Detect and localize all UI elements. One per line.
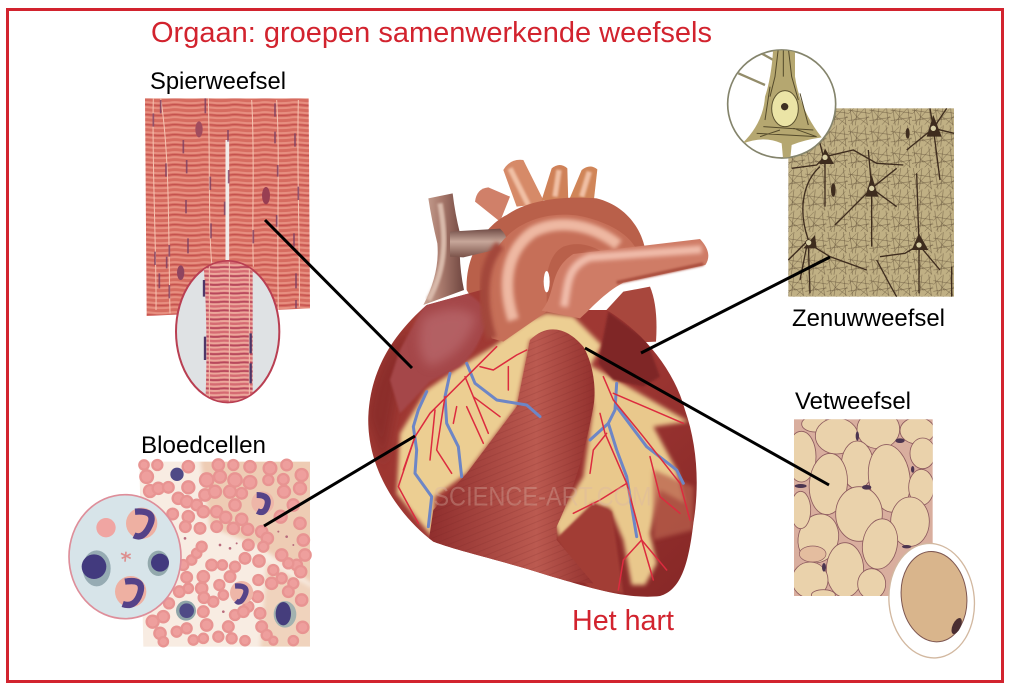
left atrium xyxy=(390,290,488,413)
central muscle xyxy=(428,329,595,583)
nerve tissue image xyxy=(788,108,954,297)
coronary veins xyxy=(413,363,683,537)
title: Orgaan: groepen samenwerkende weefsels xyxy=(151,17,712,49)
white blood cells xyxy=(170,468,296,628)
panel: spierweefsel xyxy=(145,68,310,403)
fat tissue image xyxy=(794,419,933,596)
top branch highlights xyxy=(510,168,589,205)
lower right muscle xyxy=(557,503,623,593)
heading: vetweefsel: Vetweefsel xyxy=(795,388,911,415)
superior vena cava xyxy=(423,193,507,305)
pulmonary trunk xyxy=(542,239,708,318)
left fat area xyxy=(397,313,602,537)
blood cells detail circle xyxy=(69,495,181,619)
muscle detail oval xyxy=(176,260,279,403)
panel: zenuwweefsel xyxy=(728,47,954,332)
heart surface inside outline xyxy=(367,290,693,593)
nerve cell detail circle xyxy=(728,47,836,162)
back vessel xyxy=(603,287,657,343)
top branches xyxy=(475,160,597,222)
gap under aortic arch xyxy=(544,271,550,292)
right fat area xyxy=(555,363,688,585)
back arch xyxy=(467,198,645,340)
watermark: SCIENCE-ART.COM xyxy=(433,481,652,511)
connector: zenuwweefsel to heart xyxy=(641,257,830,353)
muscle tissue image xyxy=(145,98,310,316)
heart label: Het hart xyxy=(572,605,674,637)
heading: zenuwweefsel: Zenuwweefsel xyxy=(792,305,945,332)
right fat edge tint xyxy=(653,470,693,540)
aorta xyxy=(484,215,637,342)
body shading xyxy=(368,333,406,454)
fat cell detail oval xyxy=(884,540,979,661)
right auricle xyxy=(598,312,660,387)
heading: bloedcellen: Bloedcellen xyxy=(141,432,266,459)
connector: spierweefsel to heart xyxy=(265,220,412,368)
heart body xyxy=(368,287,697,597)
blood smear image xyxy=(139,457,317,653)
connector: vetweefsel to heart xyxy=(585,348,829,485)
coronary arteries xyxy=(398,347,690,590)
panel: vetweefsel xyxy=(787,388,979,661)
panel: bloedcellen xyxy=(69,432,317,653)
heart illustration xyxy=(367,160,708,597)
heading: spierweefsel: Spierweefsel xyxy=(150,68,286,95)
connector: bloedcellen to heart xyxy=(264,436,415,526)
